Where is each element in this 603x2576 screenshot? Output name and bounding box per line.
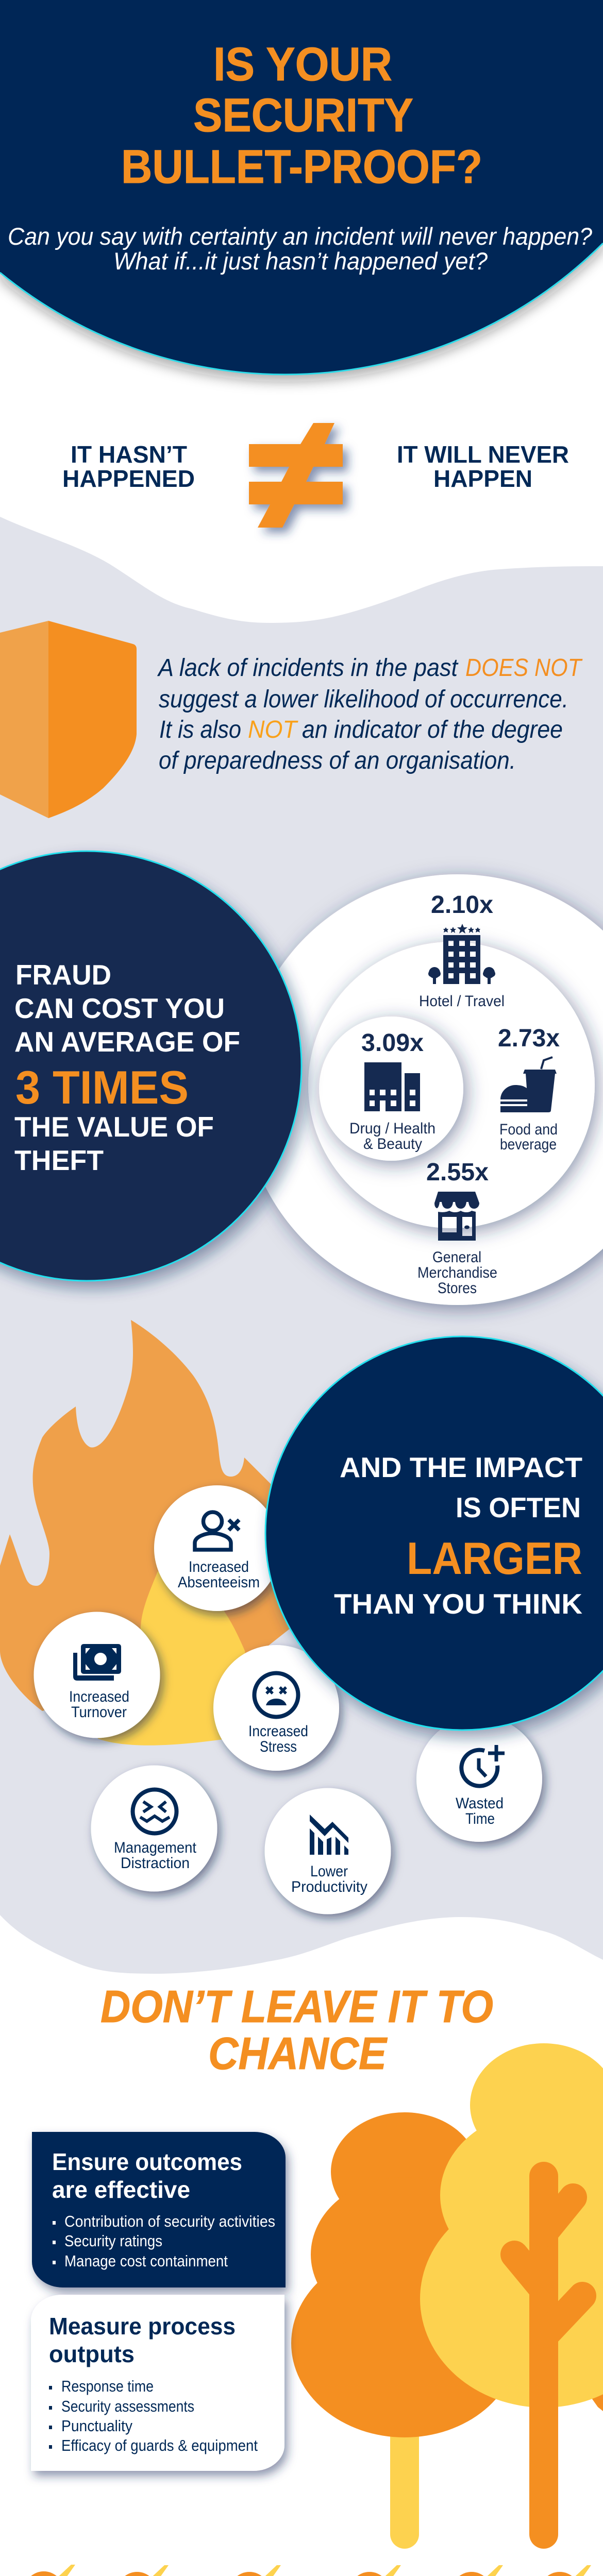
fraud statement: CAN COST YOU	[14, 992, 225, 1024]
stat: food and beverage	[498, 1025, 560, 1153]
icon: hotel	[428, 924, 495, 984]
stat: general merchandise	[417, 1159, 497, 1297]
stat: drug health beauty: Drug / Health	[349, 1120, 435, 1137]
title	[121, 38, 482, 193]
icon: store	[434, 1192, 479, 1241]
card heading: Ensure outcomes	[52, 2148, 242, 2175]
stat: drug health beauty: & Beauty	[363, 1136, 422, 1153]
heading: don't leave it to chance: DON’T LEAVE IT TO	[100, 1981, 493, 2032]
impact statement: THAN YOU THINK	[334, 1588, 582, 1620]
paragraph: lack of incidents: A lack of incidents in the past	[157, 654, 459, 682]
checklist: equipment	[440, 2565, 508, 2576]
title: SECURITY	[193, 89, 413, 142]
text: it hasn't happened: IT HASN’T	[71, 441, 187, 468]
impact: management distraction	[91, 1765, 217, 1892]
card: measure process outputs	[31, 2295, 284, 2471]
impact: wasted time: Time	[465, 1810, 495, 1827]
stat: food and beverage: 2.73x	[498, 1025, 560, 1052]
impact statement: IS OFTEN	[456, 1492, 581, 1523]
impact: wasted time	[416, 1716, 542, 1842]
title: IS YOUR	[213, 38, 392, 91]
panel: impact circle	[265, 1336, 603, 1730]
text: it will never happen: HAPPEN	[433, 465, 532, 492]
comparison row	[62, 423, 569, 528]
impact statement: AND THE IMPACT	[340, 1451, 582, 1483]
middle circle	[308, 942, 595, 1228]
card heading	[52, 2148, 242, 2203]
card list: Efficacy of guards & equipment	[61, 2436, 258, 2454]
stat: general merchandise: General	[432, 1249, 481, 1266]
header banner	[0, 0, 603, 375]
icon: falling chart	[310, 1815, 348, 1855]
title: BULLET-PROOF?	[121, 141, 482, 193]
impact: increased absenteeism: Absenteeism	[178, 1574, 260, 1591]
impact: lower productivity	[265, 1788, 391, 1914]
stat: general merchandise: 2.55x	[426, 1159, 489, 1186]
card heading: Measure process	[49, 2313, 236, 2340]
heading: don't leave it to chance	[100, 1981, 493, 2079]
checklist: functions and activities	[100, 2565, 176, 2576]
card list	[53, 2212, 275, 2270]
stat: hotel travel: 2.10x	[431, 891, 493, 919]
stat: food and beverage: Food and	[499, 1121, 558, 1138]
impact: lower productivity: Productivity	[291, 1878, 367, 1895]
fraud statement: 3 TIMES	[15, 1062, 189, 1114]
card list: Punctuality	[61, 2417, 132, 2435]
inner circle	[319, 1016, 463, 1161]
fraud statement	[14, 959, 240, 1176]
paragraph: lack of incidents: suggest a lower likelihood of occurrence.	[159, 686, 568, 713]
stat: hotel travel	[419, 891, 505, 1010]
fraud statement: THEFT	[14, 1144, 104, 1176]
icon: money	[73, 1644, 121, 1681]
paragraph: lack of incidents	[157, 654, 583, 774]
icon: shield	[0, 621, 137, 818]
icon: distracted face	[133, 1790, 176, 1833]
icon: clock plus	[461, 1745, 505, 1786]
subtitle: What if...it just hasn’t happened yet?	[113, 247, 488, 275]
paragraph: lack of incidents: of preparedness of an organisation.	[159, 747, 516, 774]
icon: stressed face	[255, 1673, 298, 1717]
icon: burger and drink	[500, 1057, 557, 1112]
stat: food and beverage: beverage	[500, 1136, 557, 1153]
stat: general merchandise: Stores	[438, 1280, 477, 1297]
impact: increased absenteeism: Increased	[189, 1558, 249, 1575]
text: it hasn't happened	[62, 441, 195, 492]
impact: increased turnover: Increased	[69, 1688, 129, 1705]
checklist: human capital	[23, 2565, 75, 2576]
impact: increased turnover	[34, 1612, 160, 1738]
stat: general merchandise: Merchandise	[417, 1264, 497, 1281]
impact: management distraction: Distraction	[121, 1855, 190, 1872]
impact: wasted time: Wasted	[456, 1795, 504, 1812]
card heading	[49, 2313, 236, 2367]
subtitle	[8, 223, 592, 275]
paragraph: lack of incidents: NOT	[248, 716, 298, 743]
heading: don't leave it to chance: CHANCE	[208, 2028, 388, 2079]
illustration: flame	[0, 1320, 330, 1745]
fraud statement: AN AVERAGE OF	[14, 1026, 240, 1058]
text: it will never happen: IT WILL NEVER	[397, 441, 569, 468]
impact: increased stress	[213, 1645, 339, 1771]
paragraph: lack of incidents: It is also	[159, 716, 241, 743]
paragraph: lack of incidents: DOES NOT	[465, 654, 583, 682]
impact: increased absenteeism	[154, 1485, 280, 1611]
card list: Response time	[61, 2377, 154, 2395]
impact statement	[334, 1451, 582, 1620]
icon: not-equal sign	[249, 423, 343, 528]
fraud statement: THE VALUE OF	[14, 1111, 214, 1143]
card heading: outputs	[49, 2341, 135, 2367]
card list: Security ratings	[64, 2232, 162, 2250]
text: it will never happen	[397, 441, 569, 492]
paragraph: lack of incidents: an indicator of the degree	[302, 716, 563, 743]
text: it hasn't happened: HAPPENED	[62, 465, 195, 492]
checklist: facilities	[533, 2565, 591, 2576]
impact statement: LARGER	[407, 1533, 582, 1584]
panel: industry circles	[242, 874, 603, 1305]
card heading: are effective	[52, 2176, 190, 2203]
panel: fraud circle	[0, 851, 301, 1281]
stat: drug health beauty: 3.09x	[361, 1029, 424, 1057]
impact: increased turnover: Turnover	[71, 1704, 127, 1721]
icon: buildings	[364, 1062, 420, 1111]
icon: absent person	[195, 1512, 239, 1550]
impact: increased stress: Stress	[260, 1738, 297, 1755]
impact: increased stress: Increased	[248, 1723, 308, 1740]
fraud statement: FRAUD	[15, 959, 111, 991]
card: ensure outcomes	[32, 2132, 286, 2287]
stat: hotel travel: Hotel / Travel	[419, 993, 505, 1010]
illustration: trees	[291, 2043, 603, 2549]
card list	[49, 2377, 258, 2454]
impact: lower productivity: Lower	[310, 1863, 348, 1880]
banner shape	[0, 0, 603, 375]
card list: Security assessments	[61, 2397, 194, 2415]
checklist: identify gaps	[202, 2565, 298, 2576]
grey wave background	[0, 517, 603, 1974]
impact: management distraction: Management	[114, 1839, 197, 1856]
outer circle	[242, 874, 603, 1305]
checklist: record and learn	[323, 2565, 418, 2576]
card list: Manage cost containment	[64, 2252, 228, 2270]
card list: Contribution of security activities	[64, 2212, 275, 2230]
stat: drug health beauty	[349, 1029, 435, 1153]
